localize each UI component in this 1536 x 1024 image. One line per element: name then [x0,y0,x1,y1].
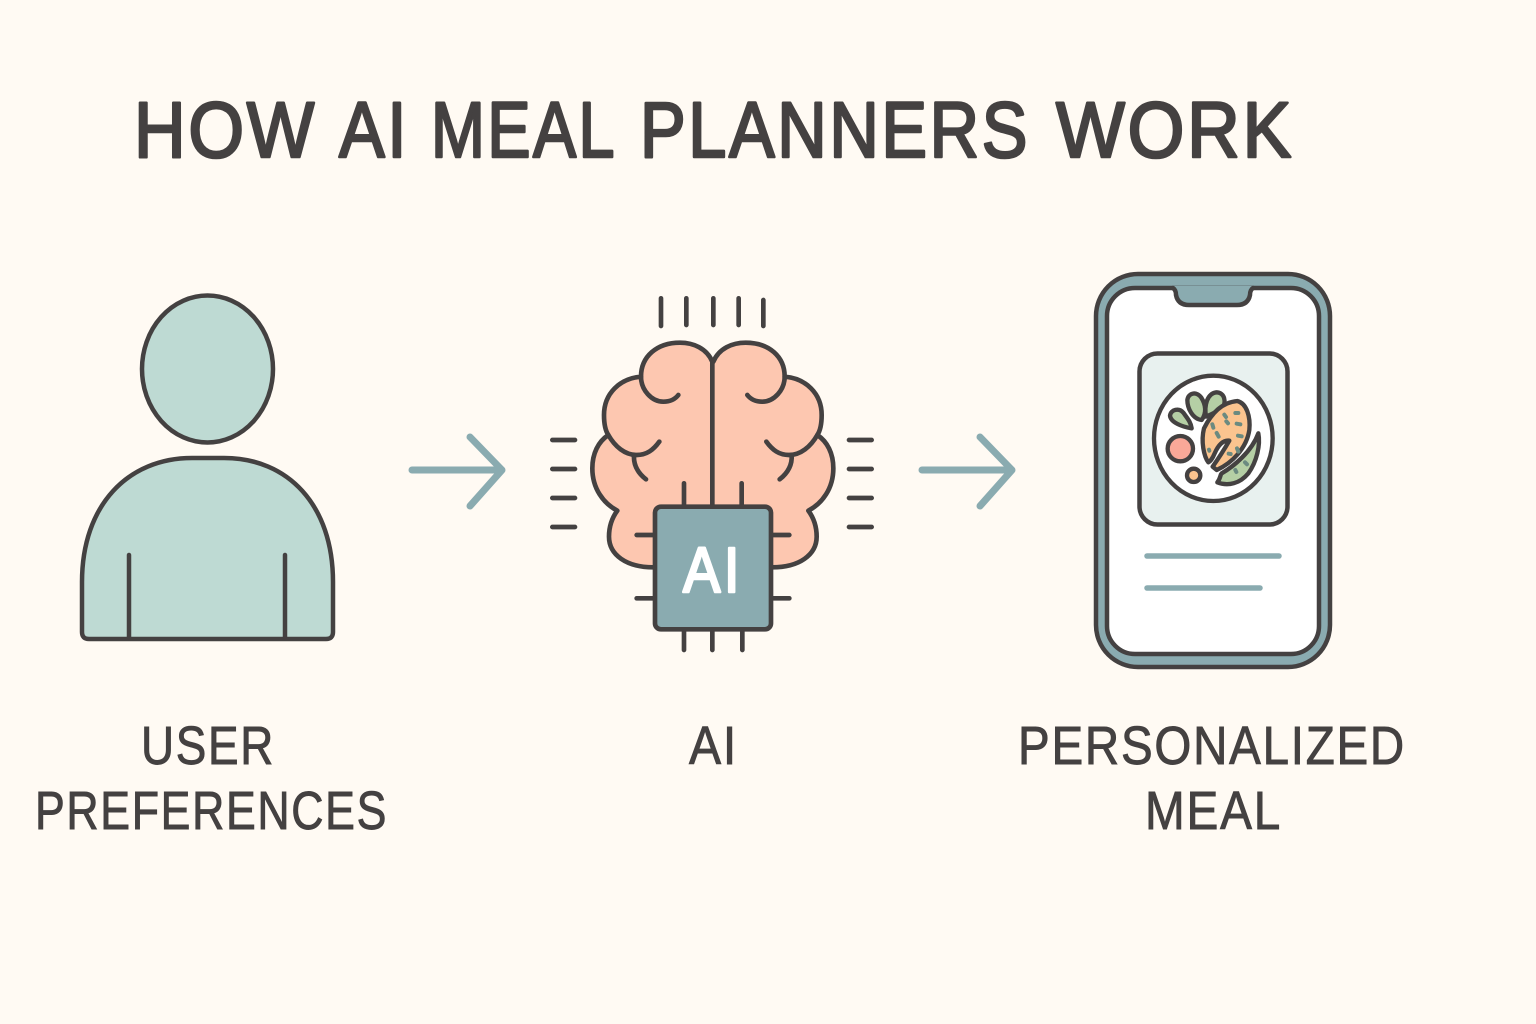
label: user preferences: USER [141,716,275,776]
title: WORK [1056,85,1294,174]
title: HOW [134,85,317,174]
label: personalized meal [1018,716,1406,841]
label: AI: AI [689,716,738,776]
icon: AI brain with chip [552,298,872,650]
meal plate [1154,376,1273,501]
label: user preferences: PREFERENCES [35,781,388,841]
arrow: AI to meal [922,437,1012,506]
title: AI [339,85,409,174]
title: PLANNERS [640,85,1030,174]
arrow: user to AI [412,437,502,506]
chip label: AI [683,534,743,606]
label: personalized meal: MEAL [1145,781,1282,841]
title [134,85,1294,174]
label: user preferences [35,716,388,841]
icon: user [82,296,333,639]
label: personalized meal: PERSONALIZED [1018,716,1406,776]
title: MEAL [431,85,617,174]
icon: phone with meal [1096,274,1330,667]
